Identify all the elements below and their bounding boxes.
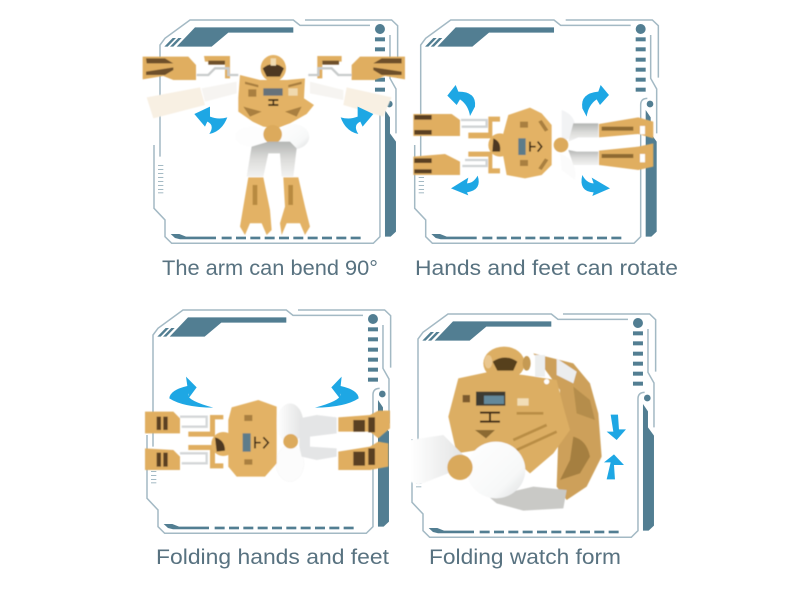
arrow: left arm up xyxy=(194,107,227,134)
arrows: four rotation arrows xyxy=(447,85,610,196)
frame: panel four xyxy=(412,314,656,537)
panel: hands and feet can rotate xyxy=(413,20,678,280)
caption: Folding watch form xyxy=(429,545,621,569)
frame: panel three xyxy=(147,310,391,533)
caption: The arm can bend 90° xyxy=(162,256,378,280)
frame: panel two xyxy=(415,20,658,243)
frame: panel one xyxy=(154,20,398,243)
robot: folded watch form xyxy=(410,347,602,511)
arrows: folding inward xyxy=(169,377,359,408)
ghost arms showing bend xyxy=(147,82,392,118)
robot: lying flat with limbs extended xyxy=(413,108,653,180)
arrow: right arm up xyxy=(341,107,373,134)
caption: Hands and feet can rotate xyxy=(415,256,678,280)
caption: Folding hands and feet xyxy=(156,545,389,569)
robot: standing with arms raised xyxy=(143,55,405,235)
panel: folding hands and feet xyxy=(145,310,391,569)
arrows: closing together xyxy=(604,415,626,479)
panel: arm can bend 90 degrees xyxy=(143,20,405,280)
panel: folding watch form xyxy=(410,314,656,569)
robot: lying with folded limbs xyxy=(145,400,390,482)
